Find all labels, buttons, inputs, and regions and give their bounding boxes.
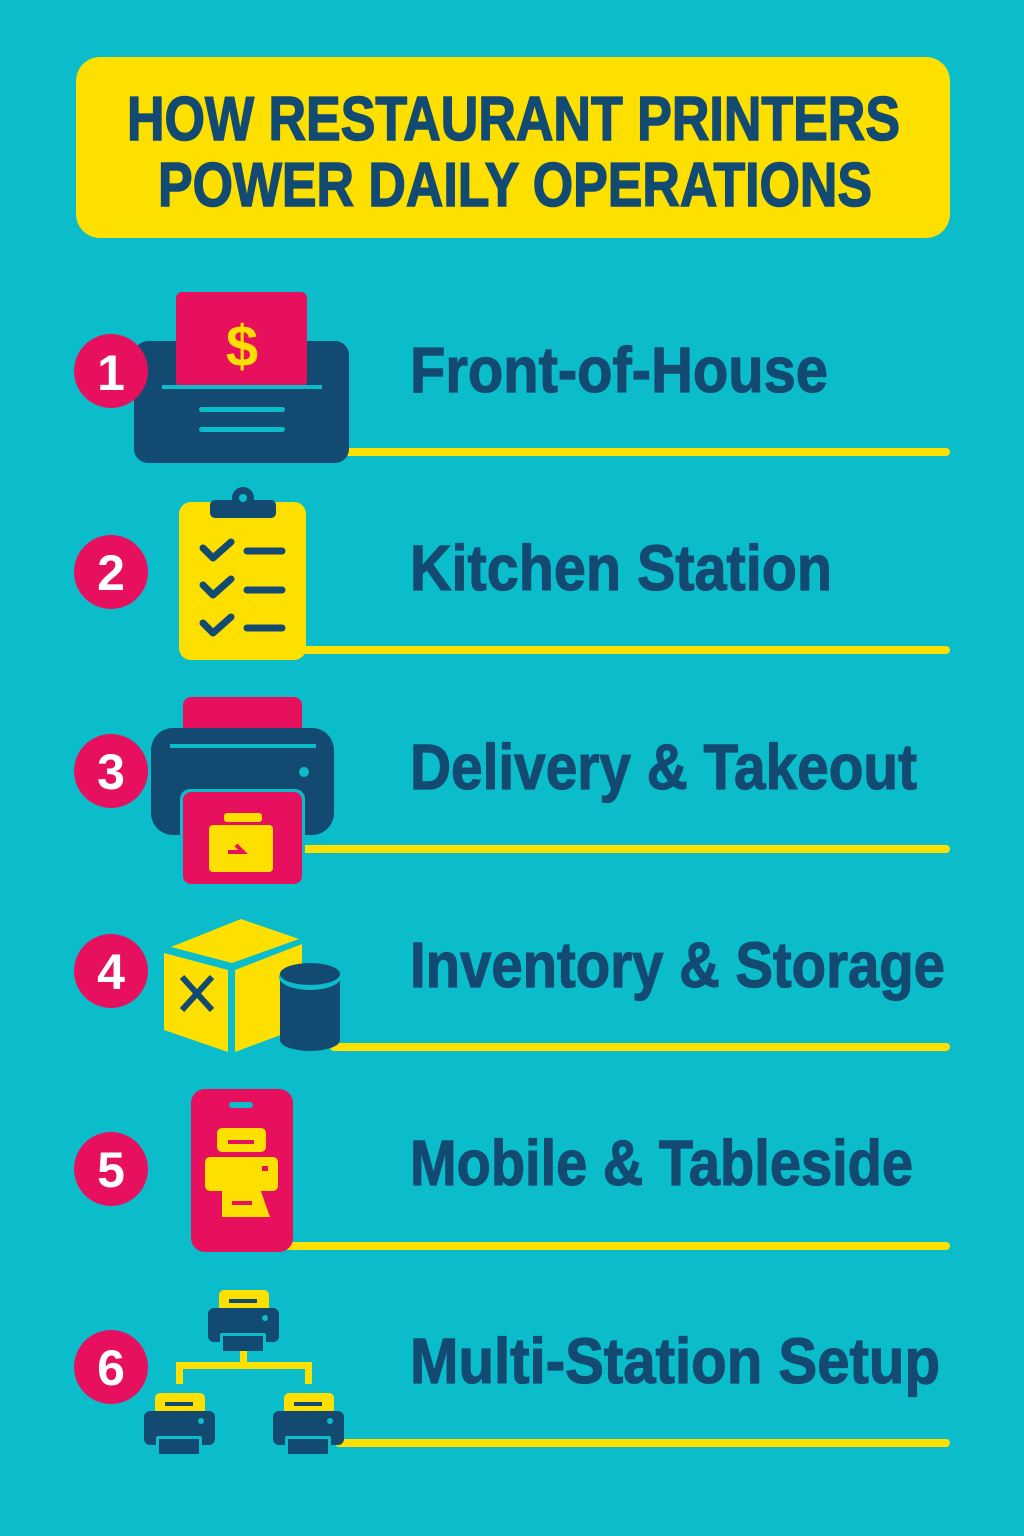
icon: receipt printer bbox=[134, 292, 349, 463]
number badge 5 bbox=[74, 1132, 148, 1206]
title: POWER DAILY OPERATIONS bbox=[158, 151, 872, 220]
row 3: Delivery & Takeout bbox=[74, 697, 950, 887]
label: Front-of-House: Front-of-House bbox=[410, 334, 828, 406]
icon: clipboard bbox=[179, 487, 306, 660]
icon: receipt printer: $ bbox=[226, 314, 258, 379]
icon: printer with package bbox=[151, 697, 334, 887]
number badge 4 bbox=[74, 934, 148, 1008]
number badge 2 bbox=[74, 535, 148, 609]
row 4: Inventory & Storage bbox=[74, 919, 950, 1052]
label: Delivery & Takeout: Delivery & Takeout bbox=[410, 731, 917, 803]
label: Kitchen Station: Kitchen Station bbox=[410, 532, 832, 604]
number badge 2: 2 bbox=[97, 545, 125, 601]
row 5: Mobile & Tableside bbox=[74, 1089, 950, 1252]
icon: box and cylinder bbox=[164, 919, 341, 1052]
number badge 1: 1 bbox=[97, 345, 125, 401]
title: HOW RESTAURANT PRINTERS bbox=[127, 85, 900, 154]
number badge 1 bbox=[74, 334, 148, 408]
label: Mobile & Tableside: Mobile & Tableside bbox=[410, 1127, 913, 1199]
row 1: Front-of-House bbox=[74, 292, 950, 463]
label: Multi-Station Setup: Multi-Station Setup bbox=[410, 1325, 940, 1397]
number badge 6: 6 bbox=[97, 1340, 125, 1396]
number badge 3 bbox=[74, 734, 148, 808]
number badge 5: 5 bbox=[97, 1142, 125, 1198]
label: Inventory & Storage: Inventory & Storage bbox=[410, 929, 945, 1001]
number badge 6 bbox=[74, 1330, 148, 1404]
number badge 4: 4 bbox=[97, 944, 125, 1000]
row 6: Multi-Station Setup bbox=[74, 1290, 950, 1454]
number badge 3: 3 bbox=[97, 744, 125, 800]
title bbox=[76, 57, 950, 238]
icon: networked printers bbox=[144, 1290, 344, 1454]
icon: phone with printer bbox=[191, 1089, 293, 1252]
row 2: Kitchen Station bbox=[74, 487, 950, 660]
